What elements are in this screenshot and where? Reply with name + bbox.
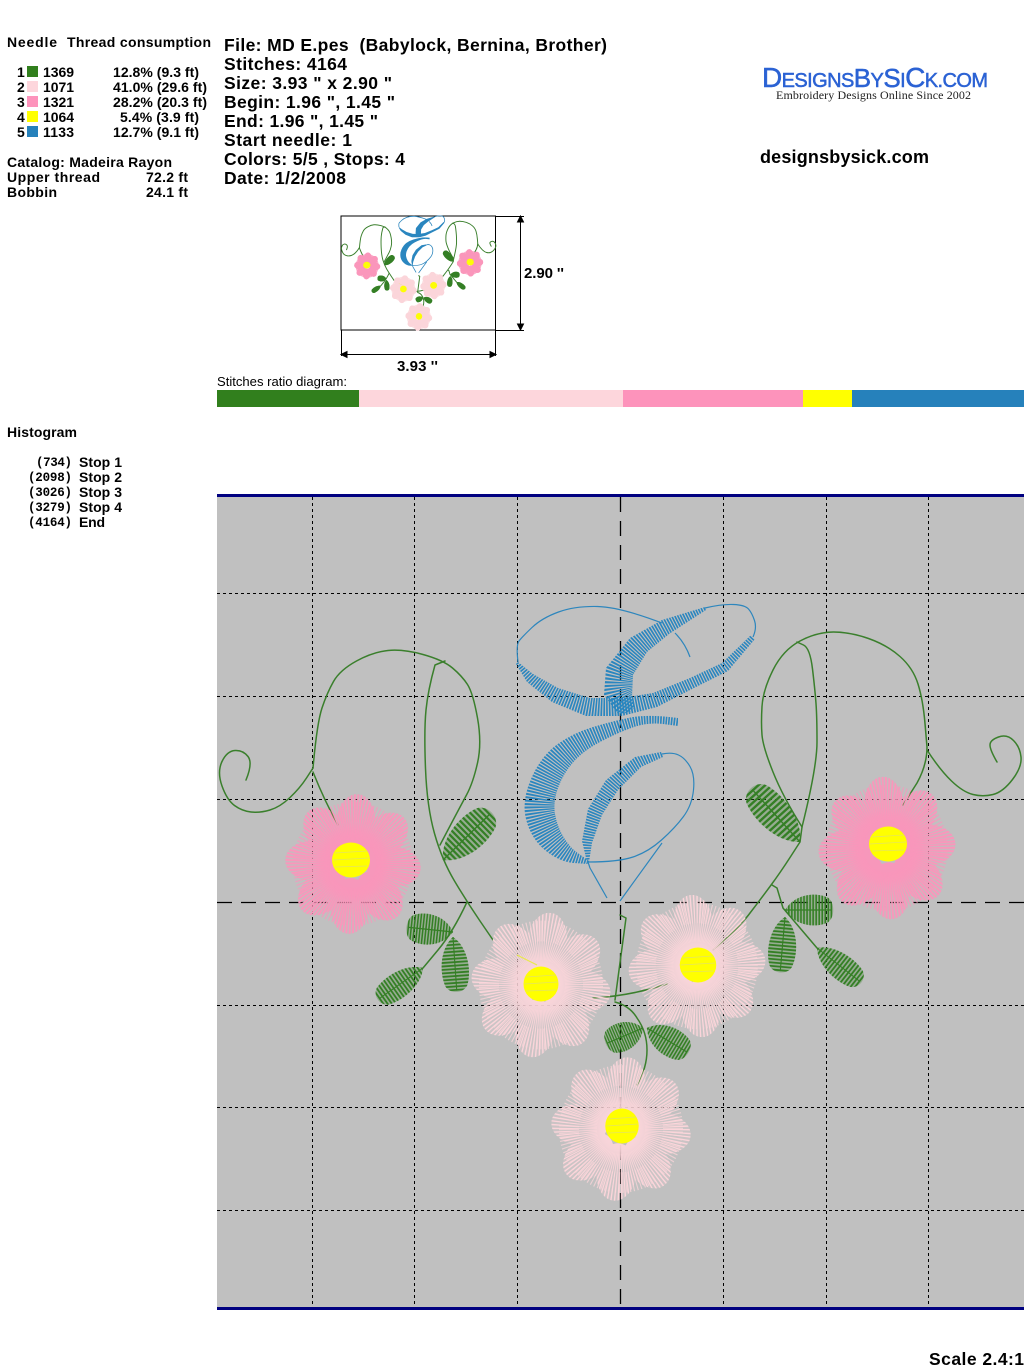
needle row 4: 4	[17, 109, 25, 125]
needle table heading: Needle	[7, 34, 57, 50]
histogram stops list: Stop 4	[79, 499, 122, 515]
histogram stops list: Stop 2	[79, 469, 122, 485]
website link text: designsbysick.com	[760, 147, 929, 167]
green leaves	[370, 776, 870, 1066]
catalog and thread totals: Upper thread	[7, 169, 100, 185]
needle row 5	[17, 124, 199, 140]
logo: DesignsBySick.com: Embroidery Designs Online Since 2002	[776, 88, 971, 102]
needle row 2: 2	[17, 79, 25, 95]
dimension lines	[341, 216, 524, 358]
histogram stops list: (2098)	[28, 471, 72, 485]
thumbnail frame	[341, 216, 496, 330]
file information block: Stitches: 4164	[224, 54, 347, 74]
needle row 3	[17, 94, 207, 110]
height label: 2.90 ''	[524, 265, 564, 282]
histogram stops list: Stop 1	[79, 454, 122, 470]
needle row 2	[17, 79, 207, 95]
needle row 5: 1133	[43, 124, 74, 140]
width label: 3.93 ''	[397, 358, 438, 375]
histogram heading: Histogram	[7, 424, 77, 440]
yellow flower centres	[332, 826, 907, 1144]
needle row 1: 12.8% (9.3 ft)	[113, 64, 199, 80]
file information block: Date: 1/2/2008	[224, 168, 346, 188]
file information block: File: MD E.pes (Babylock, Bernina, Brother)	[224, 35, 607, 55]
needle row 5: 5	[17, 124, 25, 140]
catalog and thread totals: Catalog: Madeira Rayon	[7, 154, 172, 170]
catalog and thread totals: Bobbin	[7, 184, 57, 200]
histogram stops list: End	[79, 514, 105, 530]
thumbnail artwork	[341, 216, 496, 333]
needle row 1	[17, 64, 199, 80]
histogram stops list: (734)	[36, 456, 72, 470]
scale label: Scale 2.4:1	[929, 1349, 1024, 1369]
panel background	[217, 497, 1024, 1307]
file information block: Colors: 5/5 , Stops: 4	[224, 149, 405, 169]
file information block: Begin: 1.96 ", 1.45 "	[224, 92, 395, 112]
needle row 2: 1071	[43, 79, 74, 95]
stitches ratio bar	[217, 390, 1024, 407]
needle row 1: 1369	[43, 64, 74, 80]
file information block: Start needle: 1	[224, 130, 352, 150]
pink flowers	[278, 770, 963, 941]
blue monogram letter E	[517, 604, 755, 901]
stitches ratio label: Stitches ratio diagram:	[217, 374, 347, 389]
file information block	[224, 35, 607, 188]
logo: DesignsBySick.com: DESIGNSBYSICK.COM	[762, 62, 988, 93]
needle table heading: Thread consumption	[67, 34, 211, 50]
catalog and thread totals: 72.2 ft	[146, 169, 188, 185]
histogram stops list: (3026)	[28, 486, 72, 500]
needle row 5: 12.7% (9.1 ft)	[113, 124, 199, 140]
needle row 4	[17, 109, 199, 125]
embroidered design	[220, 604, 1021, 1210]
stitch preview panel	[217, 496, 1024, 1308]
needle row 2: 41.0% (29.6 ft)	[113, 79, 207, 95]
file information block: End: 1.96 ", 1.45 "	[224, 111, 378, 131]
histogram stops list: Stop 3	[79, 484, 122, 500]
file information block: Size: 3.93 " x 2.90 "	[224, 73, 392, 93]
needle colour table	[17, 64, 207, 140]
histogram stops list: (3279)	[28, 501, 72, 515]
needle row 3: 3	[17, 94, 25, 110]
catalog and thread totals	[7, 154, 188, 200]
needle row 1: 1	[17, 64, 25, 80]
design thumbnail with dimensions	[341, 216, 564, 375]
catalog and thread totals: 24.1 ft	[146, 184, 188, 200]
histogram stops list	[28, 454, 122, 530]
needle row 4: 5.4% (3.9 ft)	[120, 109, 199, 125]
histogram stops list: (4164)	[28, 516, 72, 530]
green vines	[220, 632, 1021, 1085]
light pink flowers	[459, 887, 774, 1210]
needle row 3: 1321	[43, 94, 74, 110]
needle row 3: 28.2% (20.3 ft)	[113, 94, 207, 110]
needle row 4: 1064	[43, 109, 74, 125]
